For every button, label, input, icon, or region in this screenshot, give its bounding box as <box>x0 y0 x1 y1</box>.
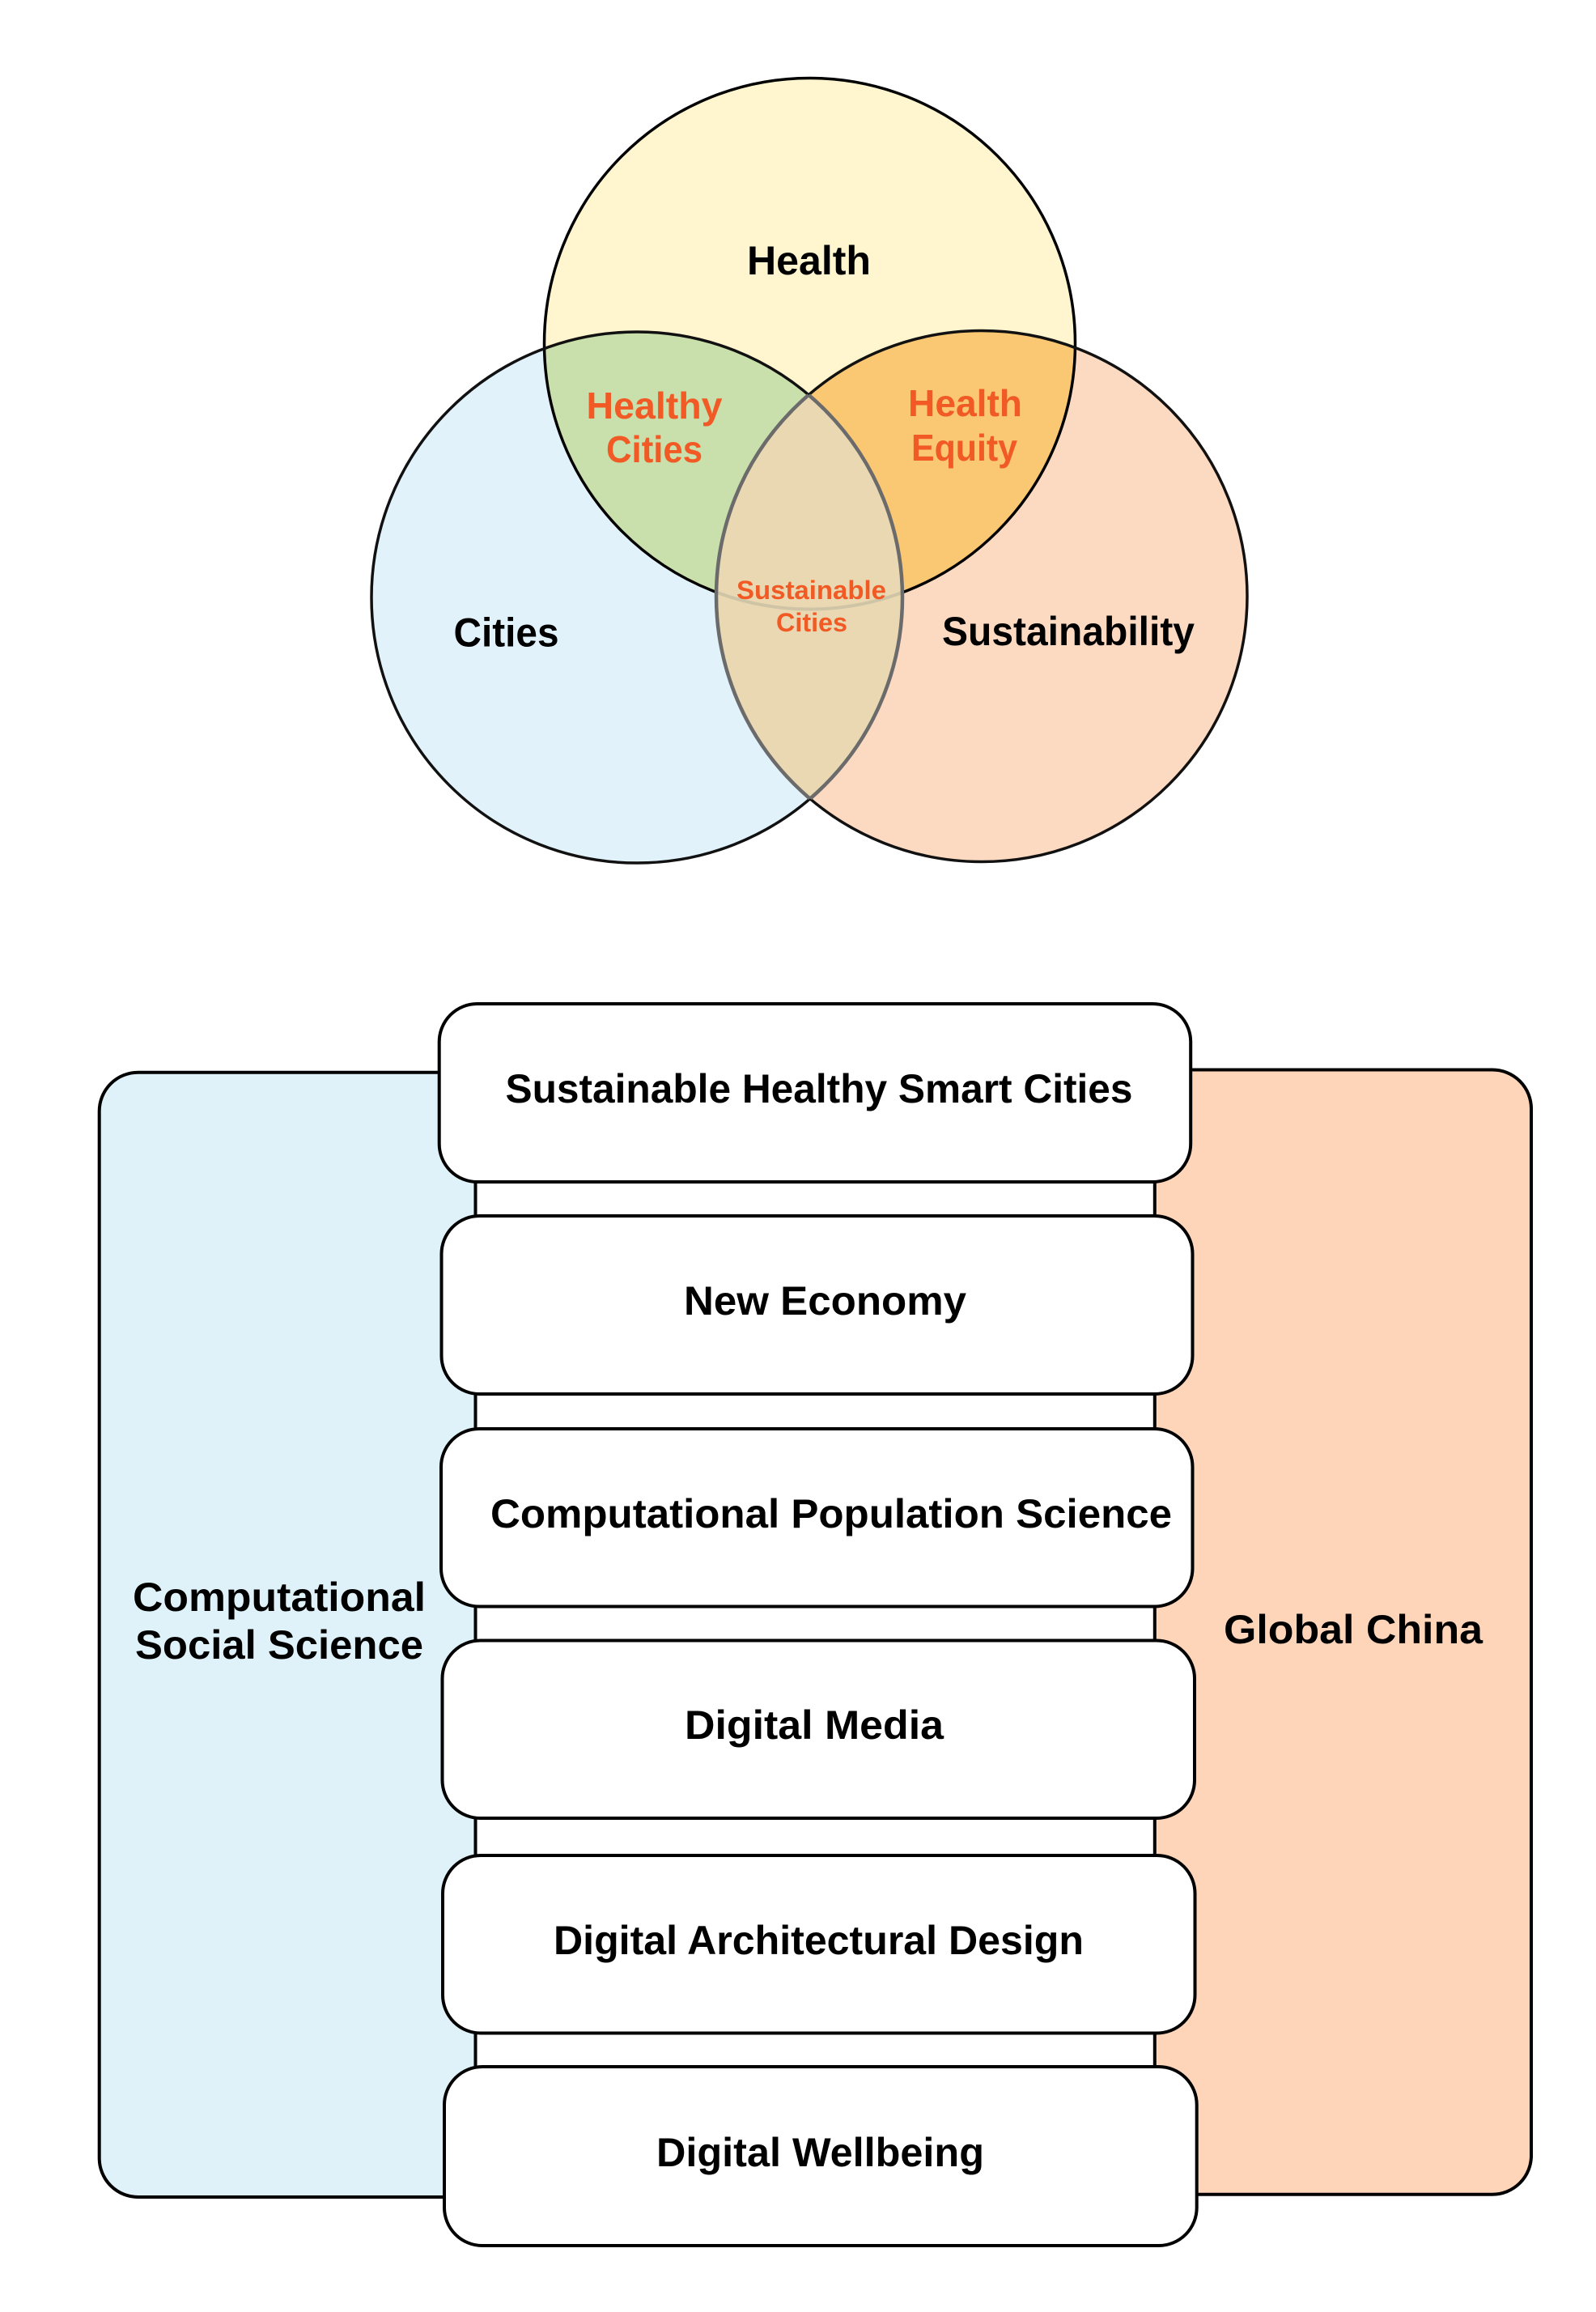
box: computational population science <box>441 1429 1193 1606</box>
overlap: health equity <box>811 332 1074 591</box>
label: health: Health <box>747 238 871 283</box>
box: digital architectural design: Digital Architectural Design <box>554 1918 1084 1963</box>
circle: sustainability <box>716 330 1247 861</box>
centre overlap right edge <box>809 393 905 800</box>
panel: global china <box>1109 1070 1531 2195</box>
box: sustainable healthy smart cities <box>439 1004 1191 1182</box>
label: global china: Global China <box>1224 1607 1484 1652</box>
faint health arc through centre overlap <box>718 591 901 610</box>
label: cities: Cities <box>453 610 558 656</box>
venn diagram <box>371 78 1247 863</box>
label: computational social science <box>133 1575 426 1668</box>
centre overlap left edge <box>714 393 810 800</box>
label: sustainability: Sustainability <box>942 609 1195 654</box>
label: sustainable cities: Cities <box>776 608 847 637</box>
circle: cities <box>371 332 902 863</box>
label: healthy cities <box>586 385 723 470</box>
central column <box>476 1133 1155 2137</box>
overlap: healthy cities <box>545 334 806 590</box>
label: computational social science: Social Science <box>135 1622 423 1668</box>
panel: computational social science <box>100 1073 520 2197</box>
label: healthy cities: Healthy <box>586 385 723 427</box>
box: digital media <box>442 1640 1195 1818</box>
box: computational population science: Computational Population Science <box>490 1491 1172 1536</box>
label: health equity <box>908 382 1022 469</box>
label: sustainable cities <box>736 576 886 637</box>
label: health equity: Health <box>908 382 1022 424</box>
label: health equity: Equity <box>911 427 1017 469</box>
overlap: sustainable cities <box>718 397 901 797</box>
label: healthy cities: Cities <box>606 428 702 470</box>
circle: health <box>544 78 1075 609</box>
outline: health circle <box>544 78 1075 609</box>
box: digital wellbeing <box>444 2067 1197 2246</box>
outline: sustainability circle <box>716 330 1247 861</box>
label: computational social science: Computational <box>133 1575 426 1620</box>
label: sustainable cities: Sustainable <box>736 576 886 605</box>
box: digital media: Digital Media <box>685 1702 944 1748</box>
box: sustainable healthy smart cities: Sustainable Healthy Smart Cities <box>505 1066 1133 1111</box>
box: new economy <box>442 1216 1193 1394</box>
stacked panel diagram <box>100 1004 1531 2246</box>
box: digital architectural design <box>443 1855 1195 2034</box>
box: new economy: New Economy <box>684 1278 966 1324</box>
box: digital wellbeing: Digital Wellbeing <box>656 2130 984 2175</box>
outline: cities circle <box>371 332 902 863</box>
